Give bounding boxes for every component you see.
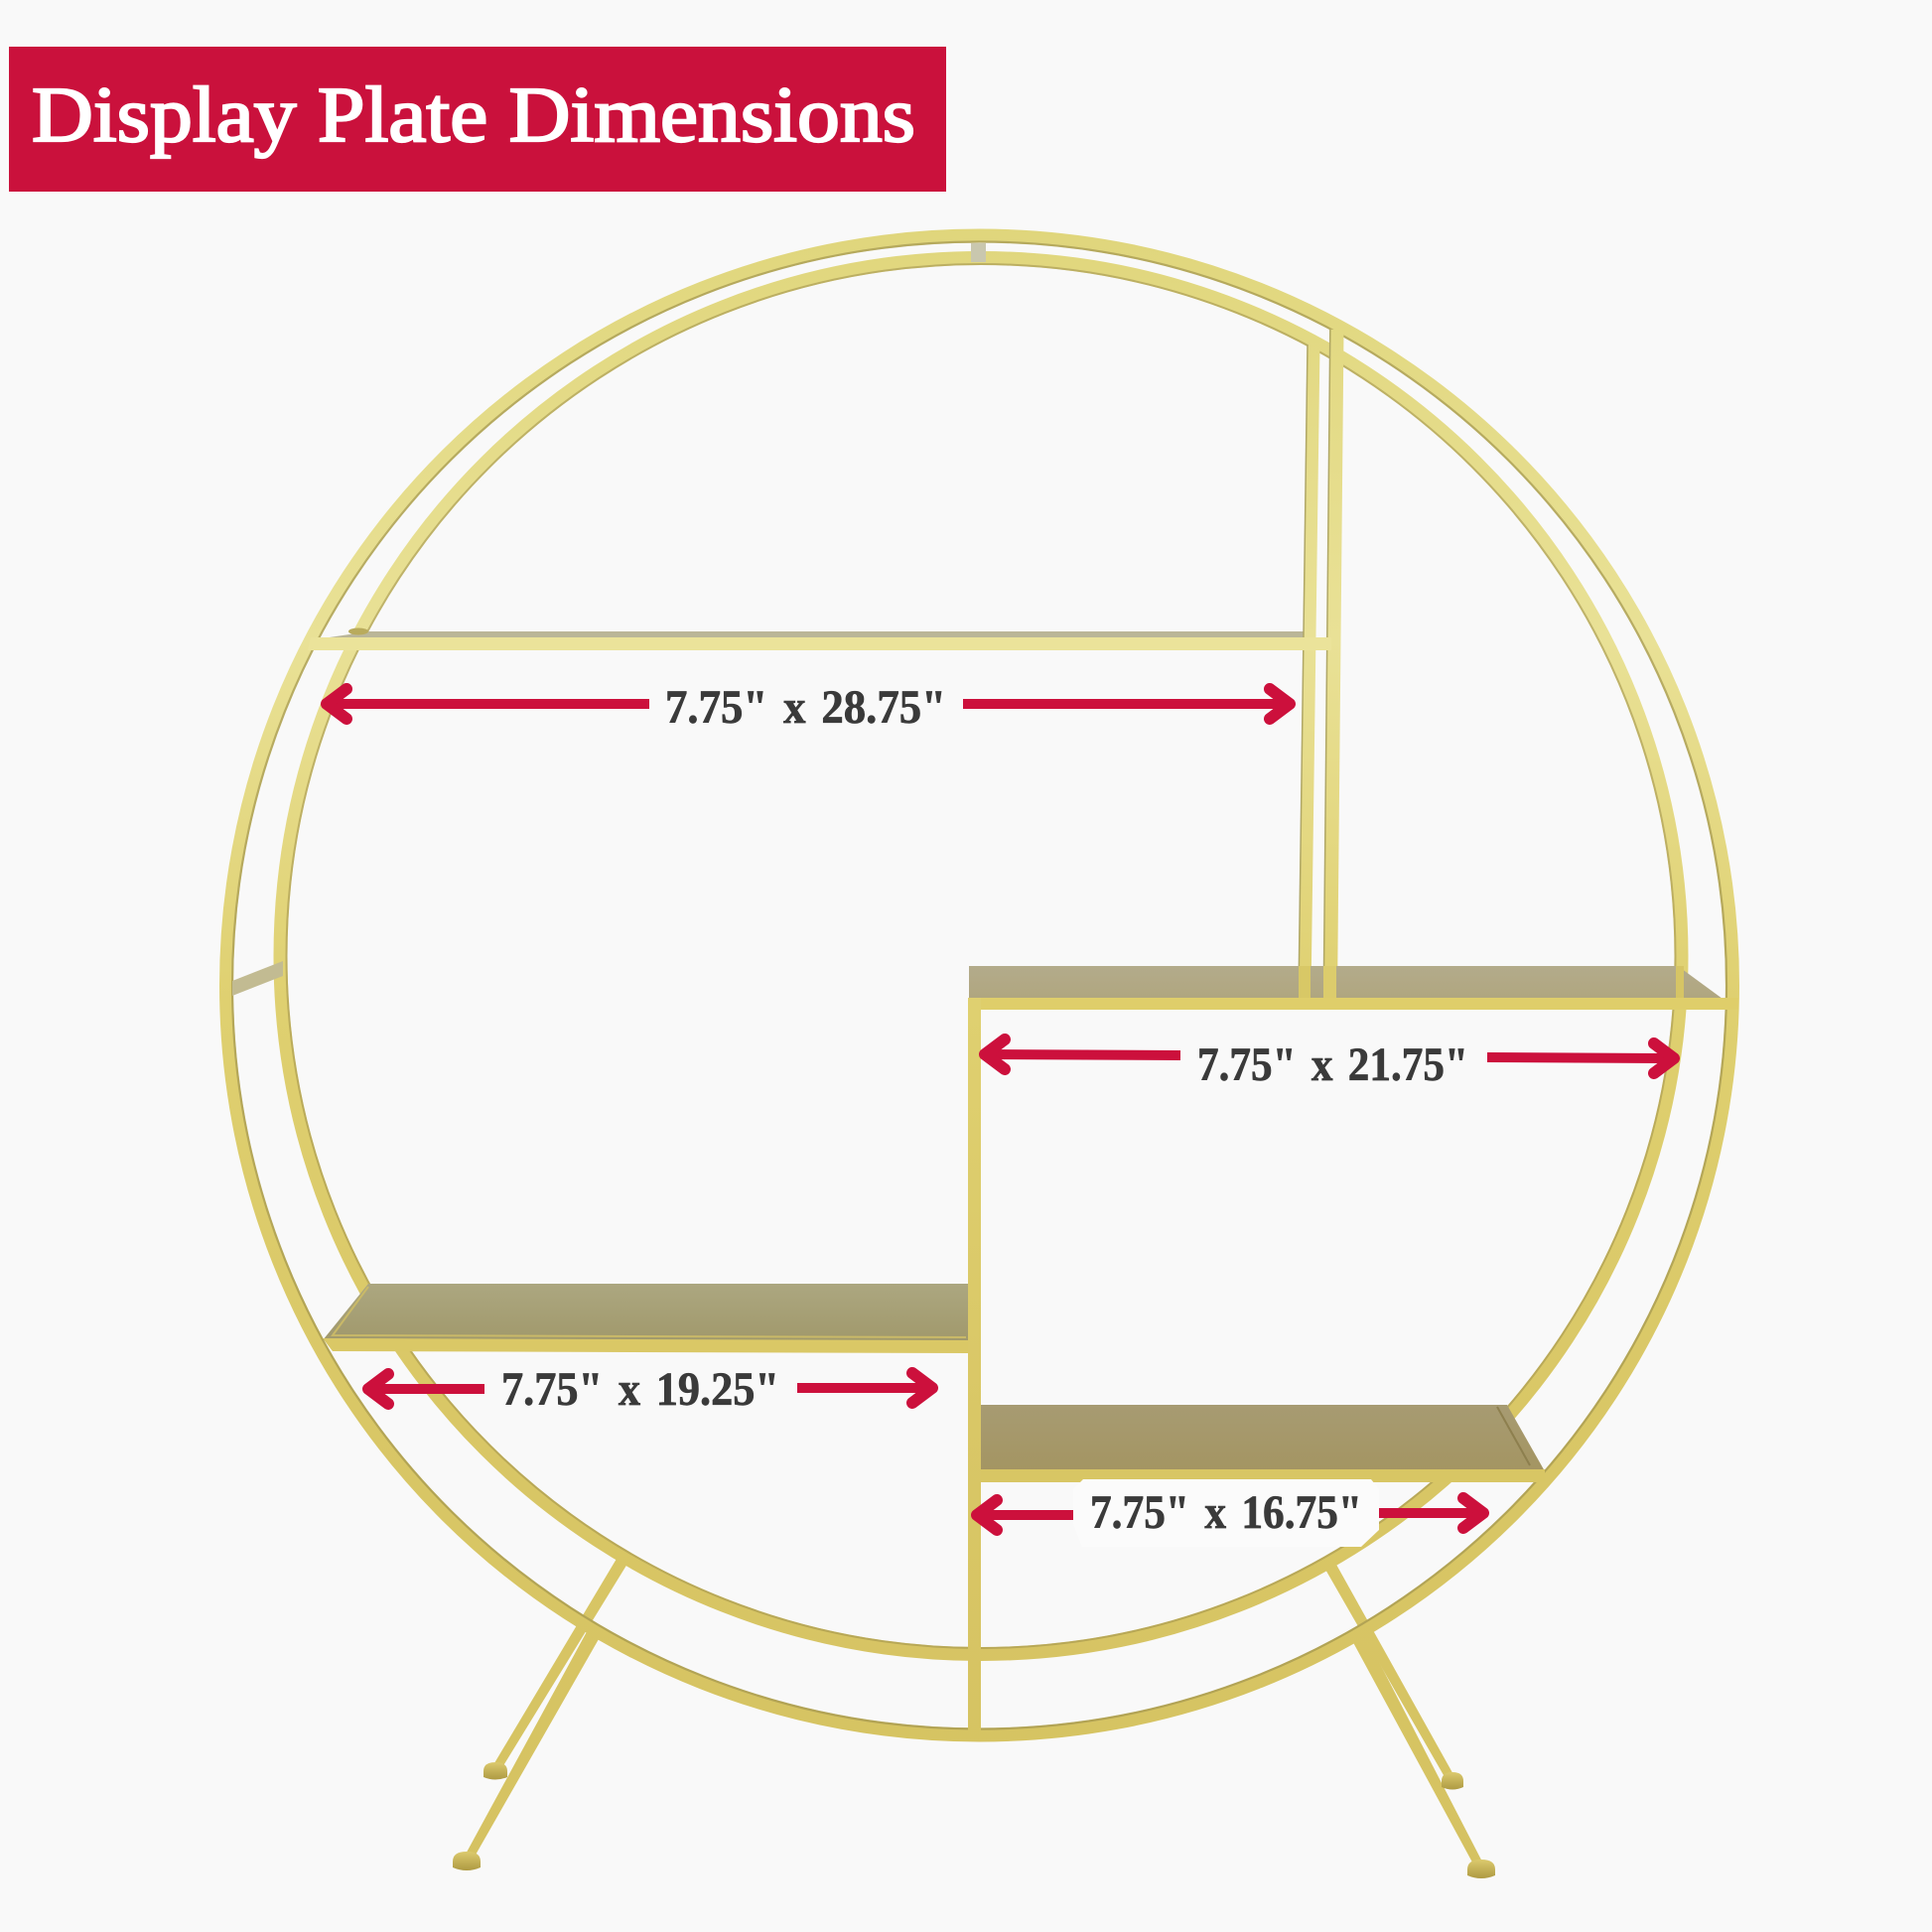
right rear leg [1324, 1563, 1455, 1782]
arrow right [797, 1373, 932, 1403]
title banner: Display Plate Dimensions [32, 72, 915, 159]
shelf 4 front bar [981, 1469, 1545, 1482]
shelf 1 front bar [308, 637, 1331, 650]
left front leg [463, 1626, 603, 1863]
shelf 4 plate [981, 1405, 1545, 1471]
central vertical post [968, 998, 981, 1731]
label: 7.75" x 19.25" [501, 1363, 779, 1416]
dimension: lower right shelf [977, 1486, 1483, 1539]
right front foot [1467, 1860, 1495, 1878]
right rear foot [1442, 1772, 1463, 1789]
front post [1323, 330, 1336, 999]
shelf 3 plate [323, 1284, 968, 1340]
shelf 2 front bar [968, 998, 1738, 1010]
right front leg [1349, 1629, 1485, 1871]
label: 7.75" x 16.75" [1090, 1486, 1362, 1539]
gold round shelf illustration [226, 236, 1738, 1878]
top ring spacer [971, 243, 986, 262]
label: 7.75" x 21.75" [1197, 1038, 1468, 1091]
dimension: top shelf [327, 681, 1290, 734]
left rear leg [491, 1559, 627, 1772]
white patch behind 16.75 label [1073, 1479, 1379, 1547]
left rear foot [483, 1762, 507, 1779]
title banner [9, 47, 946, 192]
left front foot [453, 1852, 481, 1870]
label: 7.75" x 28.75" [665, 681, 946, 734]
rear post [1299, 345, 1313, 996]
arrow left [368, 1374, 484, 1404]
dimension: middle right shelf [985, 1038, 1674, 1091]
front post on shelf 2 [1323, 966, 1336, 999]
arrow left [985, 1039, 1180, 1069]
shelf 1 plate [323, 631, 1306, 638]
ring reflection on shelf 2 [1676, 966, 1684, 998]
arrow left [327, 689, 649, 719]
shelf 3 front bar [323, 1338, 968, 1353]
left ring spacer [232, 961, 283, 996]
shelf 2 plate [969, 966, 1723, 999]
arrow right [963, 689, 1290, 719]
inner ring [280, 258, 1682, 1654]
outer ring [226, 236, 1732, 1735]
shelf 4 plate edge [1497, 1407, 1530, 1465]
arrow left [977, 1500, 1073, 1530]
rear post reflection on shelf 2 [1299, 966, 1311, 998]
arrow right [1487, 1043, 1674, 1073]
arrow right [1379, 1498, 1483, 1528]
shelf 3 plate edge [333, 1287, 966, 1337]
dimension: lower left shelf [368, 1363, 932, 1416]
shelf 1 bolt [348, 627, 368, 635]
